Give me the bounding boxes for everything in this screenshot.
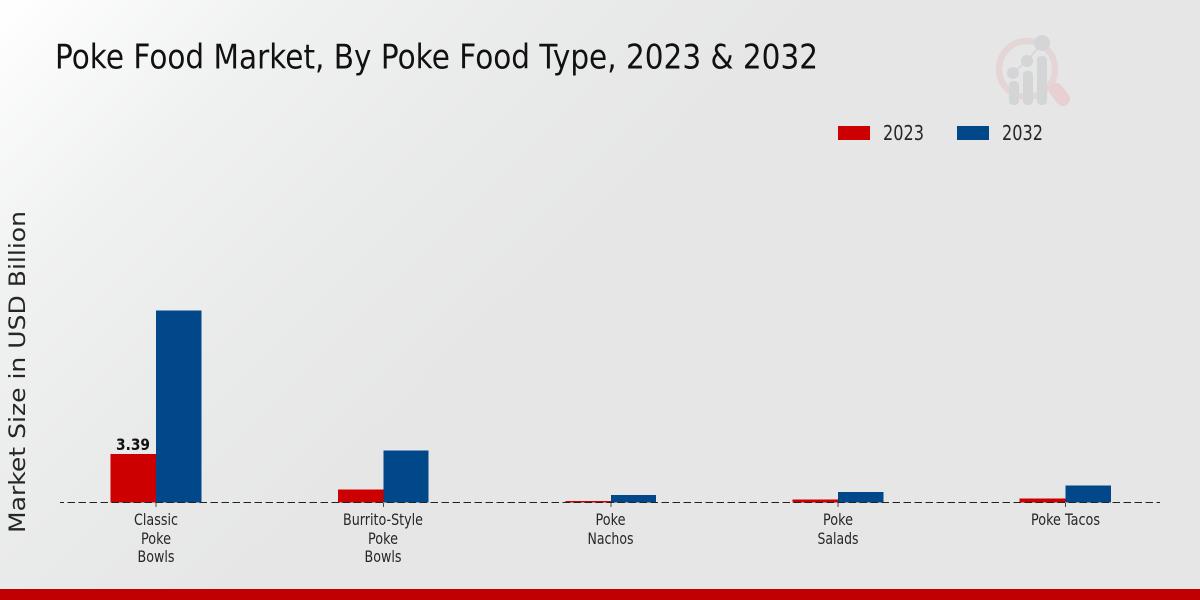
- group: Poke Nachos bars: [566, 495, 656, 502]
- icon: magnifier logo watermark: [999, 35, 1063, 105]
- value label: 3.39: 3.39: [116, 435, 150, 454]
- legend: [838, 121, 1043, 145]
- group: Poke Tacos bars: [1020, 486, 1111, 502]
- group: Burrito-Style Poke Bowls bars: [338, 450, 428, 502]
- footer red bar: [0, 589, 1200, 600]
- category label: Burrito-Style Poke Bowls: Bowls: [364, 547, 402, 566]
- category label: Poke Nachos: Nachos: [588, 529, 634, 548]
- category label: Burrito-Style Poke Bowls: Poke: [368, 529, 398, 548]
- x axis dashed baseline: [60, 502, 1160, 507]
- legend item: 2032: [957, 121, 1043, 145]
- category label: Poke Salads: Salads: [818, 529, 858, 548]
- category label: Poke Tacos: Poke Tacos: [1031, 510, 1100, 529]
- group: Poke Salads bars: [792, 492, 884, 502]
- legend item: 2023: 2023: [883, 121, 924, 145]
- category label: Classic Poke Bowls: Poke: [141, 529, 171, 548]
- y axis label: Market Size in USD Billion: [5, 211, 31, 533]
- category label: Poke Nachos: Poke: [596, 510, 626, 529]
- legend item: 2023: [838, 121, 924, 145]
- category label: Classic Poke Bowls: Bowls: [138, 547, 174, 566]
- group: Classic Poke Bowls bars: [110, 310, 202, 502]
- category label: Classic Poke Bowls: Classic: [134, 510, 178, 529]
- category label: Burrito-Style Poke Bowls: Burrito-Style: [343, 510, 423, 529]
- title: Poke Food Market, By Poke Food Type, 2023 & 2032: [55, 38, 818, 78]
- category label: Poke Salads: Poke: [823, 510, 853, 529]
- legend item: 2032: 2032: [1002, 121, 1043, 145]
